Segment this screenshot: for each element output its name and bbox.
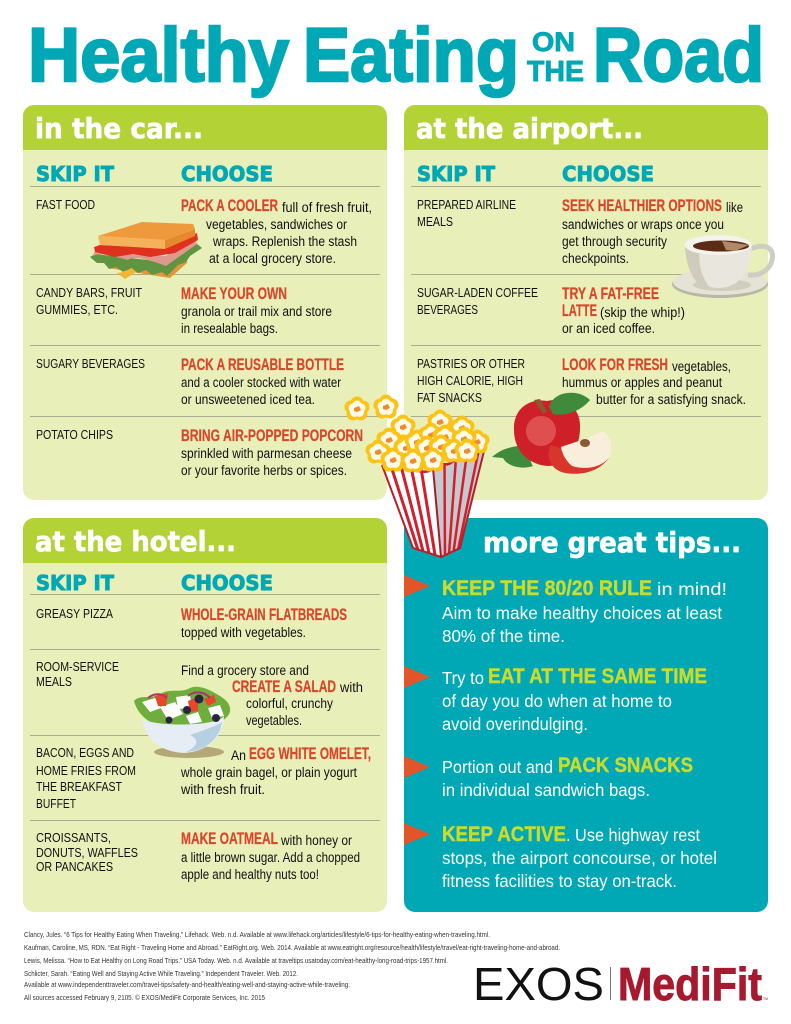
row: coffee beverages: SUGAR-LADEN COFFEE [417,285,538,300]
row: greasy pizza: WHOLE-GRAIN FLATBREADS [181,606,347,624]
row: pastries: hummus or apples and peanut [562,375,722,390]
row: potato chips: POTATO CHIPS [36,427,113,442]
row: pastries: vegetables, [672,359,731,374]
row: airline meals: SEEK HEALTHIER OPTIONS [562,197,722,215]
tip 4: . Use highway rest [566,825,700,845]
tip 3: in individual sandwich bags. [442,780,650,800]
icon: sandwich [90,222,202,279]
column headings: CHOOSE [181,162,273,186]
row: candy bars: in resealable bags. [181,321,278,336]
sources: Kaufman, Caroline, MS, RDN. “Eat Right - Traveling Home and Abroad.” EatRight.org. Web. 2014. Available at www.eatright.org/resource/health/lifestyle/travel/eat-right-traveling-home-and-abroad. [24,943,560,952]
tip 2: EAT AT THE SAME TIME [488,665,707,688]
row: fast food: at a local grocery store. [209,251,336,266]
icon: salad bowl [134,687,230,758]
row: croissants [36,830,360,882]
row: croissants: MAKE OATMEAL [181,830,278,848]
row: room service: ROOM-SERVICE [36,659,119,674]
panel: in the car [23,105,387,500]
row: pastries: HIGH CALORIE, HIGH [417,373,523,388]
arrow: tip 1 [404,575,430,597]
row: room service: colorful, crunchy [246,696,333,711]
row: candy bars [36,285,332,336]
row: potato chips: or your favorite herbs or spices. [181,463,347,478]
row: greasy pizza: GREASY PIZZA [36,606,113,621]
column headings: CHOOSE [181,571,273,595]
tip 3: Portion out and [442,757,553,777]
column headings: SKIP IT [417,162,495,186]
sources: Schlicter, Sarah. “Eating Well and Staying Active While Traveling.” Independent Traveler. Web. 2012. [24,969,298,978]
arrow: tip 2 [404,666,430,688]
row: fast food: PACK A COOLER [181,197,278,215]
tip 1 [442,577,727,646]
row: breakfast buffet: with fresh fruit. [180,782,265,797]
tip 1: Aim to make healthy choices at least [442,603,722,623]
row: room service: MEALS [36,674,72,689]
row: airline meals: MEALS [417,214,453,229]
row: airline meals [417,197,743,266]
row: coffee beverages: or an iced coffee. [562,321,655,336]
column headings: SKIP IT [36,162,114,186]
row: potato chips: BRING AIR-POPPED POPCORN [181,427,363,445]
row: coffee beverages: (skip the whip!) [600,305,685,320]
logo: EXOS MediFit: TM [763,996,768,1001]
row: fast food: wraps. Replenish the stash [212,234,357,249]
column headings [36,162,273,186]
row: croissants: with honey or [280,833,352,848]
row: breakfast buffet: HOME FRIES FROM [36,763,136,778]
row: croissants: DONUTS, WAFFLES [36,845,138,860]
row: potato chips: sprinkled with parmesan cheese [181,446,352,461]
row: greasy pizza: topped with vegetables. [181,625,306,640]
row: pastries: PASTRIES OR OTHER [417,356,525,371]
tip 2: avoid overindulging. [442,714,588,734]
sources: Clancy, Jules. “6 Tips for Healthy Eating When Traveling.” Lifehack. Web. n.d. Available at www.lifehack.org/articles/lifestyle/6-tips-for-healthy-eating-when-traveling.html. [24,930,490,939]
icon: coffee cup [672,235,772,298]
row: breakfast buffet: EGG WHITE OMELET, [249,745,371,763]
column headings: SKIP IT [36,571,114,595]
column headings [36,571,273,595]
logo: EXOS MediFit [473,958,768,1010]
row: room service [36,659,363,728]
column headings: CHOOSE [562,162,654,186]
row: sugary beverages: PACK A REUSABLE BOTTLE [181,356,344,374]
sources: Available at www.independenttraveler.com/travel-tips/safety-and-health/eating-well-and-staying-active-while-traveling. [24,980,350,989]
icon: popcorn [344,394,490,557]
title: Eating [303,13,519,98]
row: fast food: vegetables, sandwiches or [206,217,347,232]
row: croissants: OR PANCAKES [36,859,113,874]
row: potato chips [36,427,363,478]
arrow: tip 4 [404,823,430,845]
row: pastries: FAT SNACKS [417,390,482,405]
tip 2: Try to [442,668,484,688]
row: croissants: apple and healthy nuts too! [181,867,319,882]
tip 4: KEEP ACTIVE [442,823,566,846]
row: coffee beverages: LATTE [562,302,597,320]
icon: apple [492,393,611,474]
row: coffee beverages [417,285,685,336]
row: breakfast buffet: An [231,748,246,763]
row: candy bars: granola or trail mix and store [181,304,332,319]
row: sugary beverages: and a cooler stocked with water [181,375,341,390]
row: breakfast buffet: whole grain bagel, or plain yogurt [180,765,357,780]
logo: EXOS MediFit: EXOS [473,958,604,1010]
row: breakfast buffet: BACON, EGGS AND [36,745,134,760]
row: room service: Find a grocery store and [181,663,309,678]
row: coffee beverages: TRY A FAT-FREE [562,285,659,303]
heading: in the car: in the car... [35,112,203,145]
title: ON [532,27,575,57]
tip 4: stops, the airport concourse, or hotel [442,848,717,868]
row: airline meals: sandwiches or wraps once you [562,217,724,232]
column headings [417,162,654,186]
heading: more great tips: more great tips... [483,526,741,559]
sources: Lewis, Melissa. “How to Eat Healthy on Long Road Trips.” USA Today. Web. n.d. Available at traveltips.usatoday.com/eat-healthy-long-road-trips-1957.html. [24,956,448,965]
row: croissants: a little brown sugar. Add a chopped [181,850,360,865]
row: coffee beverages: BEVERAGES [417,302,478,317]
logo: EXOS MediFit: MediFit [618,958,762,1010]
row: airline meals: PREPARED AIRLINE [417,197,516,212]
panel: at the hotel [23,518,387,912]
row: pastries: LOOK FOR FRESH [562,356,668,374]
row: fast food: FAST FOOD [36,197,95,212]
popcorn bucket [382,447,485,557]
row: breakfast buffet: BUFFET [36,796,76,811]
tip 1: in mind! [657,579,727,599]
row: croissants: CROISSANTS, [36,830,111,845]
tip 2: of day you do when at home to [442,691,672,711]
row: sugary beverages: or unsweetened iced tea. [181,392,315,407]
row: airline meals: get through security [562,234,667,249]
row: fast food: full of fresh fruit, [282,200,372,215]
panel: more great tips [404,518,768,912]
title: THE [527,56,584,88]
row: room service: with [339,680,363,695]
row: sugary beverages [36,356,344,407]
heading: at the airport: at the airport... [416,112,643,145]
row: airline meals: checkpoints. [562,251,629,266]
row: room service: vegetables. [246,713,302,728]
heading: at the hotel: at the hotel... [35,525,236,558]
row: candy bars: GUMMIES, ETC. [36,302,118,317]
tip 3 [442,754,693,800]
tip 3: PACK SNACKS [558,754,693,777]
sources: All sources accessed February 9, 2105. © EXOS/MediFit Corporate Services, Inc. 2015 [24,993,265,1002]
title: Healthy [28,13,289,98]
tip 4 [442,823,717,891]
title [28,13,764,98]
panel: at the airport [404,105,772,500]
row: airline meals: like [726,200,743,215]
sources [24,930,560,1002]
tip 4: fitness facilities to stay on-track. [442,871,677,891]
arrow: tip 3 [404,756,430,778]
row: greasy pizza [36,606,347,640]
row: fast food [36,197,372,266]
tip 2 [442,665,707,734]
row: pastries [417,356,746,407]
tip 1: KEEP THE 80/20 RULE [442,577,652,600]
row: candy bars: MAKE YOUR OWN [181,285,287,303]
row: sugary beverages: SUGARY BEVERAGES [36,356,145,371]
row: candy bars: CANDY BARS, FRUIT [36,285,142,300]
title: Road [593,13,764,98]
row: pastries: butter for a satisfying snack. [596,392,746,407]
tip 1: 80% of the time. [442,626,565,646]
popcorn kernels [344,394,490,472]
row: breakfast buffet [36,745,371,811]
row: breakfast buffet: THE BREAKFAST [36,779,122,794]
row: room service: CREATE A SALAD [232,678,336,696]
